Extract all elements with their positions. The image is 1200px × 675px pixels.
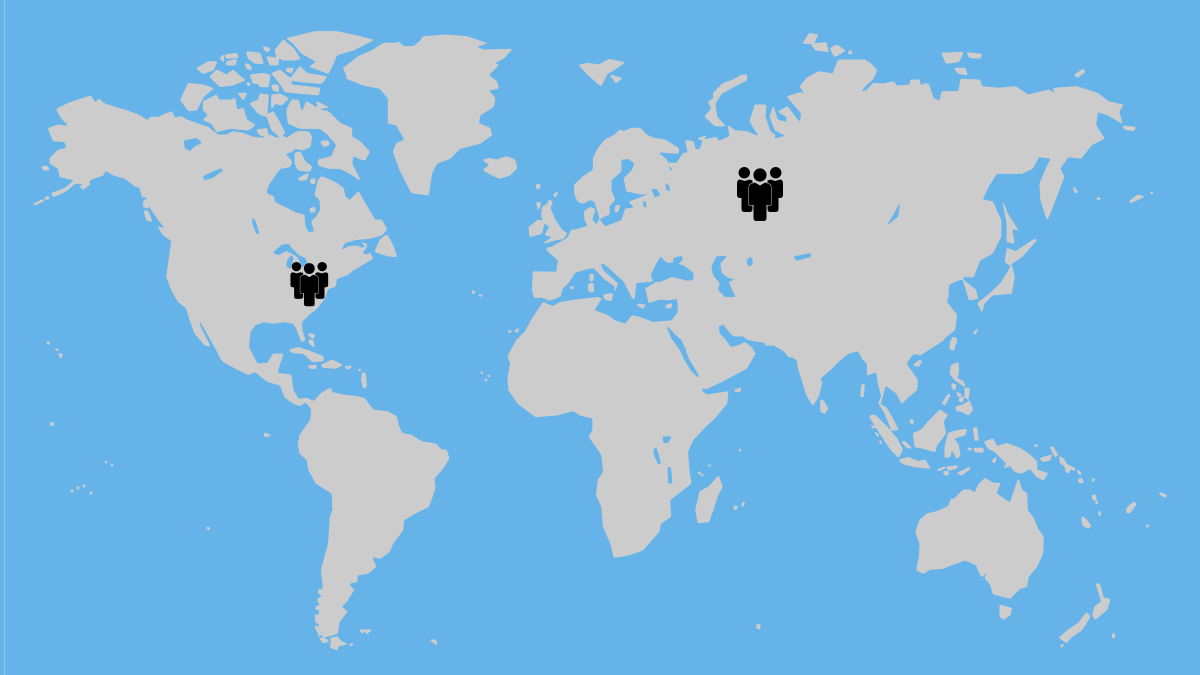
land: north america and greenland <box>33 32 517 360</box>
mediterranean, black sea, caspian sea, red sea and persian gulf <box>542 256 765 350</box>
land: south america, central america, africa and arabia <box>206 297 760 650</box>
islands in inland seas <box>570 205 672 308</box>
mediterranean islands <box>570 274 672 308</box>
land: southern europe and middle east block <box>532 230 742 327</box>
baltic sea and northern lakes <box>600 159 670 226</box>
land: scandinavia, northern europe and british isles <box>529 128 715 250</box>
icon: group of people over russia <box>737 167 783 221</box>
land: russian arctic coast and novaya zemlya <box>700 60 940 193</box>
land: south asia, southeast asia and oceania <box>780 333 1167 647</box>
land: asia and russia east <box>508 33 1153 360</box>
north american lakes <box>135 138 308 268</box>
lakes and inland seas <box>135 138 900 483</box>
african lakes <box>654 437 672 483</box>
icon: group of people over north america <box>290 262 328 306</box>
asian lakes <box>794 203 900 261</box>
baltic island <box>615 205 620 212</box>
small pacific islands <box>50 422 209 529</box>
